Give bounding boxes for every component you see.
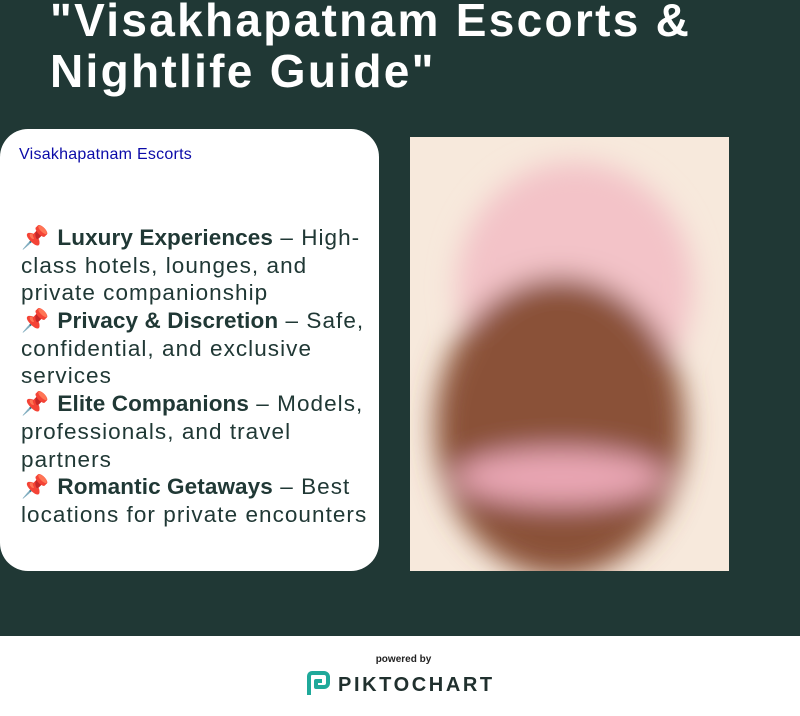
image placeholder: abstract colour block (410, 137, 729, 571)
feature list: professionals, and travel (21, 419, 291, 444)
feature list: private companionship (21, 280, 268, 305)
link text: Visakhapatnam Escorts (19, 146, 192, 163)
feature list (21, 225, 367, 527)
feature list: locations for private encounters (21, 502, 367, 527)
piktochart logo (307, 671, 495, 696)
feature list: 📌 Romantic Getaways – Best (21, 474, 350, 499)
title (50, 0, 691, 97)
icon: piktochart mark (309, 673, 328, 695)
feature list: 📌 Elite Companions – Models, (21, 391, 363, 416)
wordmark: PIKTOCHART (338, 674, 495, 696)
powered by text: powered by (376, 654, 431, 665)
feature list: confidential, and exclusive (21, 336, 312, 361)
title: Nightlife Guide" (50, 45, 436, 97)
footer (0, 636, 800, 716)
feature list: partners (21, 446, 112, 472)
feature list: 📌 Privacy & Discretion – Safe, (21, 308, 364, 333)
feature list: class hotels, lounges, and (21, 253, 307, 278)
feature list: 📌 Luxury Experiences – High- (21, 225, 360, 250)
panel: text card (0, 129, 379, 571)
feature list: services (21, 363, 112, 388)
